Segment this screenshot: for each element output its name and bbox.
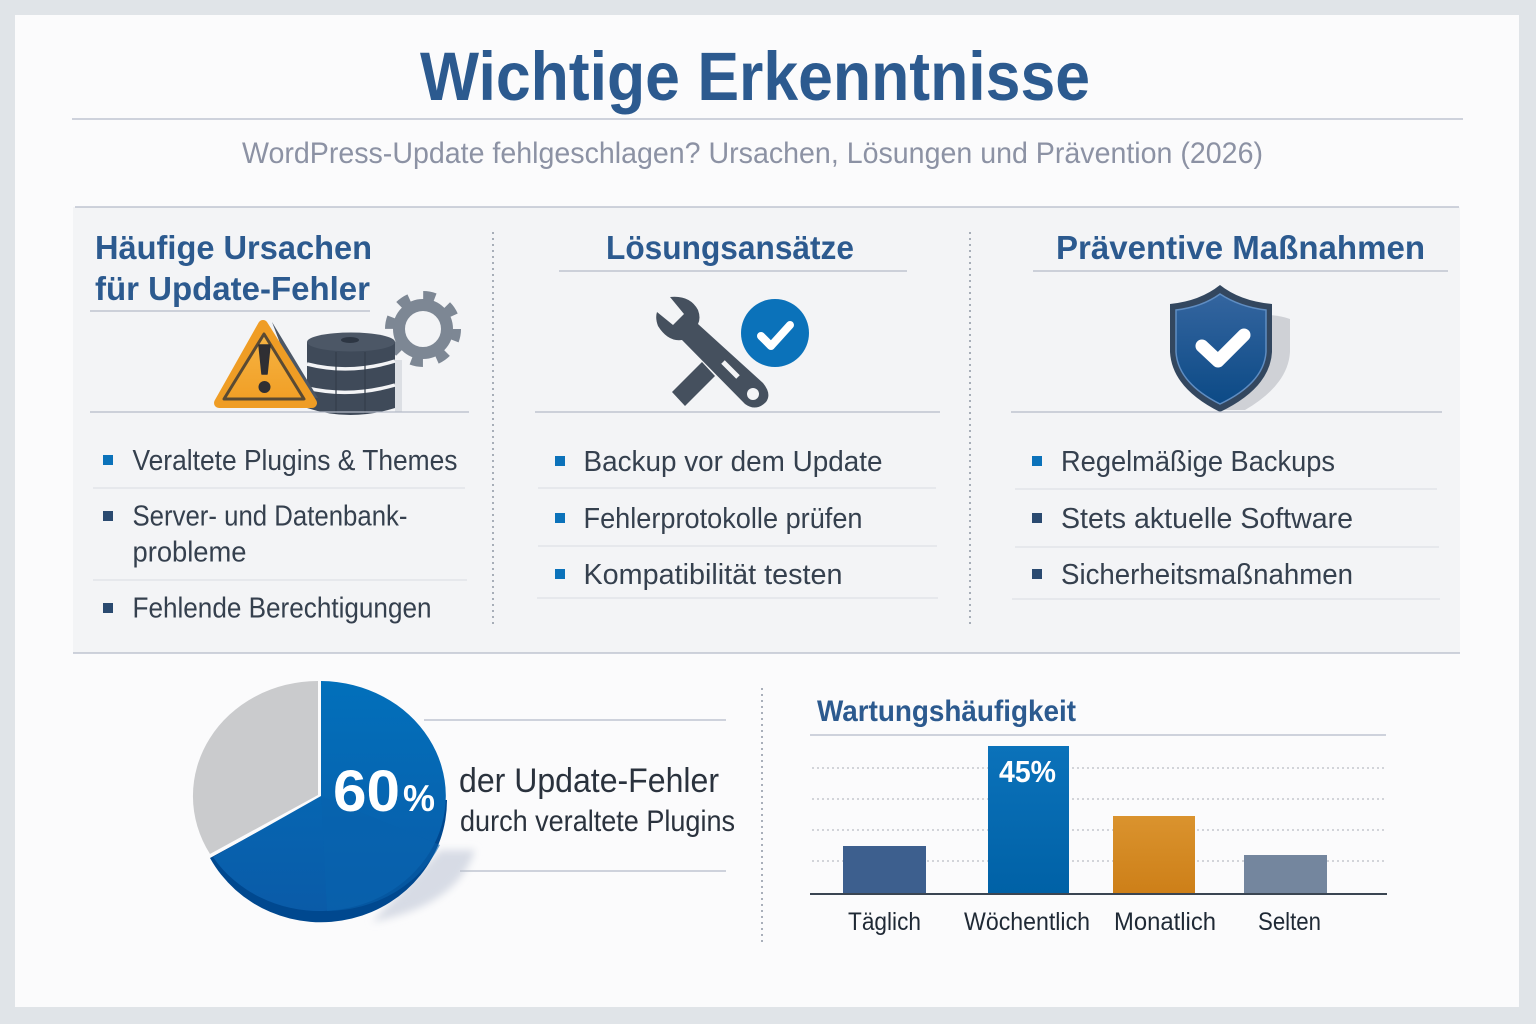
bar: daily [843,846,926,894]
column: prevention [1011,229,1448,599]
axis labels: Selten [1258,908,1321,936]
pie chart: 60 percent: % [403,778,435,819]
heading: causes: Häufige Ursachen [95,229,372,266]
bar chart: maintenance frequency [810,695,1387,936]
list: prevention: Regelmäßige Backups [1061,446,1335,478]
axis labels [848,908,1321,936]
column: solutions [535,229,940,598]
pie chart: 60 percent [193,681,726,922]
icon: shield with check [1170,285,1290,412]
bar value: 45% [999,754,1056,789]
bar: weekly [988,746,1069,894]
pie value: 60 [333,759,400,824]
icon: wrench and check [656,297,809,408]
pie caption: der Update-Fehler [459,762,719,800]
heading: prevention: Präventive Maßnahmen [1056,229,1425,266]
bar: monthly [1113,816,1195,894]
axis labels: Täglich [848,908,921,936]
pie caption [459,762,735,838]
list: solutions [537,446,938,598]
title: Wichtige Erkenntnisse [420,38,1090,115]
heading: causes [90,229,372,311]
list: causes: Veraltete Plugins & Themes [132,445,458,477]
subtitle: WordPress-Update fehlgeschlagen? Ursachen, Lösungen und Prävention (2026) [242,137,1263,170]
list: prevention: Stets aktuelle Software [1061,503,1353,535]
list: solutions: Kompatibilität testen [584,559,842,591]
list: causes: probleme [132,536,246,568]
list: prevention [1012,446,1440,599]
chart heading: Wartungshäufigkeit [817,695,1076,728]
list: solutions: Backup vor dem Update [584,446,882,478]
list: causes: Server- und Datenbank- [132,500,408,532]
axis labels: Monatlich [1114,908,1216,936]
panel: three columns [73,207,1460,653]
list: causes: Fehlende Berechtigungen [132,592,432,624]
column: causes [90,229,469,624]
axis labels: Wöchentlich [964,908,1090,936]
pie caption: durch veraltete Plugins [460,805,735,838]
icon: warning, database and gear [219,296,456,415]
list: prevention: Sicherheitsmaßnahmen [1061,559,1353,591]
bar: rarely [1244,855,1327,894]
heading: solutions: Lösungsansätze [606,229,854,266]
heading: causes: für Update-Fehler [95,270,370,307]
list: solutions: Fehlerprotokolle prüfen [584,503,862,535]
list: causes [93,445,467,624]
